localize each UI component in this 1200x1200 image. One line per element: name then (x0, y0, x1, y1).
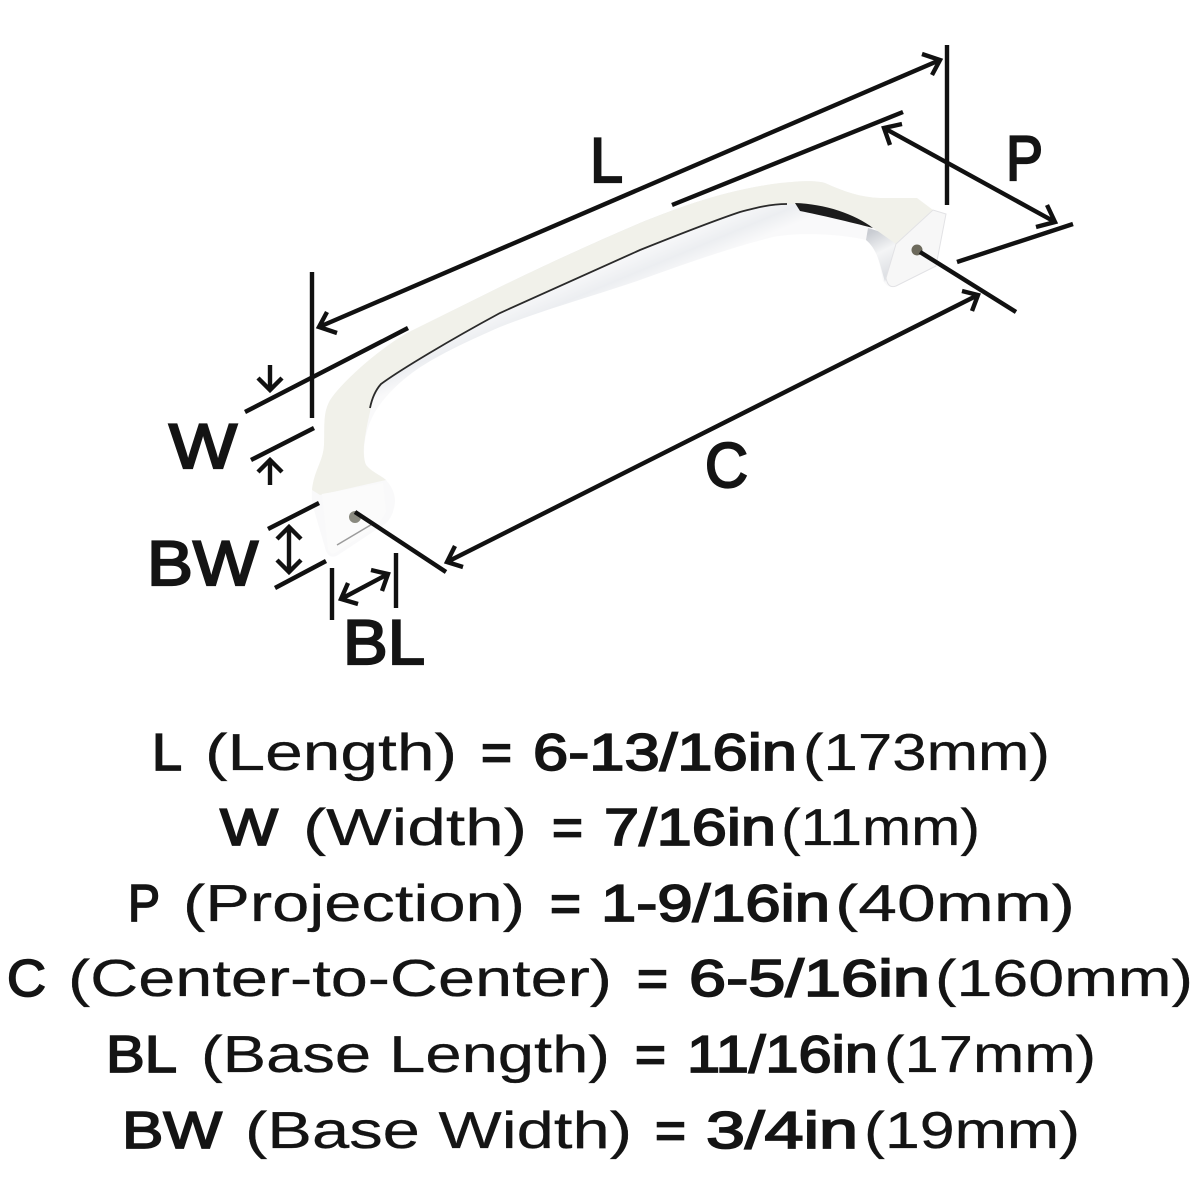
spec: projection: 1-9/16in (601, 875, 830, 933)
right stem shading (866, 228, 900, 282)
spec: projection: P (128, 875, 160, 933)
specification list (7, 724, 1193, 1160)
spec: width: (Width) (303, 799, 527, 857)
P dimension (884, 124, 1073, 262)
spec: length: = (481, 724, 512, 782)
spec: length: L (152, 724, 182, 782)
BW dimension (268, 503, 326, 588)
spec: base width: 3/4in (706, 1102, 858, 1160)
C dimension (355, 252, 1016, 572)
label W: W (169, 412, 238, 482)
dark chrome reflection (795, 203, 873, 228)
spec: width: (11mm) (781, 799, 980, 857)
label P: P (1006, 124, 1043, 194)
spec: width: = (552, 799, 583, 857)
diagram letter labels (147, 124, 1043, 678)
handle body underside (312, 181, 945, 557)
spec: length: 6-13/16in (533, 724, 797, 782)
spec: projection: (Projection) (183, 875, 525, 933)
right base face (886, 210, 946, 287)
handle top face (312, 181, 933, 495)
spec: center-to-center (7, 950, 1193, 1008)
spec: base length: BL (106, 1026, 177, 1084)
W dimension (245, 112, 903, 485)
label C: C (705, 431, 748, 501)
spec: base width: BW (122, 1102, 222, 1160)
spec: base length: (Base Length) (201, 1026, 610, 1084)
spec: base length: 11/16in (687, 1026, 878, 1084)
spec: base width (122, 1102, 1080, 1160)
spec: base length: (17mm) (884, 1026, 1096, 1084)
spec: base width: (19mm) (864, 1102, 1080, 1160)
left base face (322, 483, 386, 554)
spec: width: W (220, 799, 278, 857)
product: cabinet pull handle (312, 181, 946, 557)
L dimension (312, 45, 947, 418)
label L: L (590, 126, 623, 196)
spec: projection (128, 875, 1075, 933)
dimension lines (245, 45, 1073, 620)
spec: base length: = (635, 1026, 666, 1084)
spec: center-to-center: 6-5/16in (689, 950, 930, 1008)
handle highlight edge (370, 204, 787, 408)
spec: length (152, 724, 1050, 782)
left mounting hole (349, 511, 361, 523)
spec: width: 7/16in (604, 799, 776, 857)
spec: center-to-center: C (7, 950, 46, 1008)
spec: width (220, 799, 980, 857)
spec: length: (Length) (205, 724, 457, 782)
label BL: BL (343, 608, 425, 678)
BL dimension (332, 553, 396, 620)
spec: base width: (Base Width) (245, 1102, 632, 1160)
spec: projection: (40mm) (835, 875, 1075, 933)
spec: base length (106, 1026, 1096, 1084)
right mounting hole (912, 244, 922, 256)
label BW: BW (147, 529, 259, 599)
spec: center-to-center: (Center-to-Center) (68, 950, 612, 1008)
spec: base width: = (655, 1102, 686, 1160)
spec: center-to-center: (160mm) (935, 950, 1193, 1008)
spec: center-to-center: = (637, 950, 668, 1008)
left base highlight (337, 523, 374, 545)
spec: length: (173mm) (803, 724, 1050, 782)
spec: projection: = (550, 875, 581, 933)
